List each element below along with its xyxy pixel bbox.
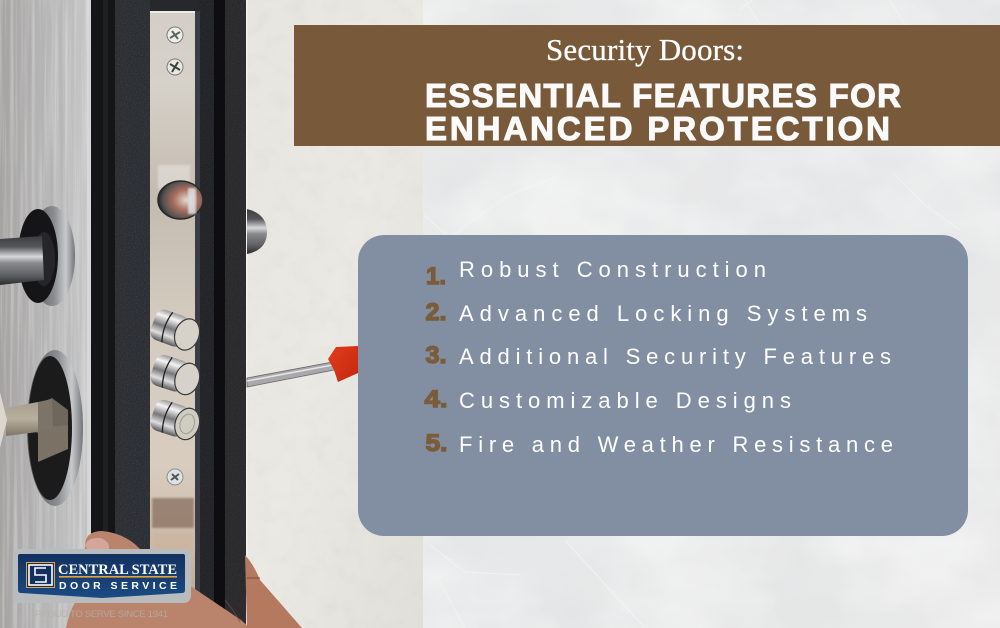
list numbers: 3. <box>426 342 446 369</box>
lower door handle <box>0 350 83 506</box>
upper door handle <box>0 206 75 306</box>
list items: Additional Security Features <box>459 344 891 369</box>
hands <box>66 531 302 628</box>
heading: main title: ENHANCED PROTECTION <box>425 110 890 147</box>
heading: subtitle: Security Doors: <box>546 32 744 67</box>
heading: main title: ESSENTIAL FEATURES FOR <box>425 77 901 114</box>
wall <box>245 0 423 628</box>
list items <box>459 257 893 457</box>
list numbers: 2. <box>426 299 446 326</box>
panel: features list <box>358 235 968 536</box>
logo: Central State Door Service: CENTRAL STATE <box>58 562 177 578</box>
side pin <box>247 209 267 254</box>
list items: Customizable Designs <box>459 388 791 413</box>
door leaf <box>0 0 94 628</box>
logo tagline: PROUD TO SERVE SINCE 1941 <box>35 609 168 620</box>
lock plate <box>150 11 200 628</box>
list numbers: 1. <box>426 263 446 290</box>
list items: Advanced Locking Systems <box>459 301 867 326</box>
background: marble texture <box>422 0 1000 628</box>
screwdriver <box>247 346 358 387</box>
list numbers: 5. <box>426 430 448 457</box>
logo: Central State Door Service <box>13 549 191 603</box>
screws <box>167 27 183 485</box>
logo emblem <box>26 562 54 588</box>
logo: Central State Door Service: DOOR SERVICE <box>59 580 177 592</box>
list items: Fire and Weather Resistance <box>459 432 893 457</box>
list numbers <box>424 263 448 457</box>
photo: door and wall <box>0 0 423 628</box>
list numbers: 4. <box>424 386 448 413</box>
heading: main title <box>425 77 901 147</box>
list items: Robust Construction <box>459 257 766 282</box>
door frame <box>91 0 248 628</box>
three deadbolts <box>148 307 204 443</box>
round bolt <box>158 181 203 219</box>
title banner <box>294 25 1000 147</box>
